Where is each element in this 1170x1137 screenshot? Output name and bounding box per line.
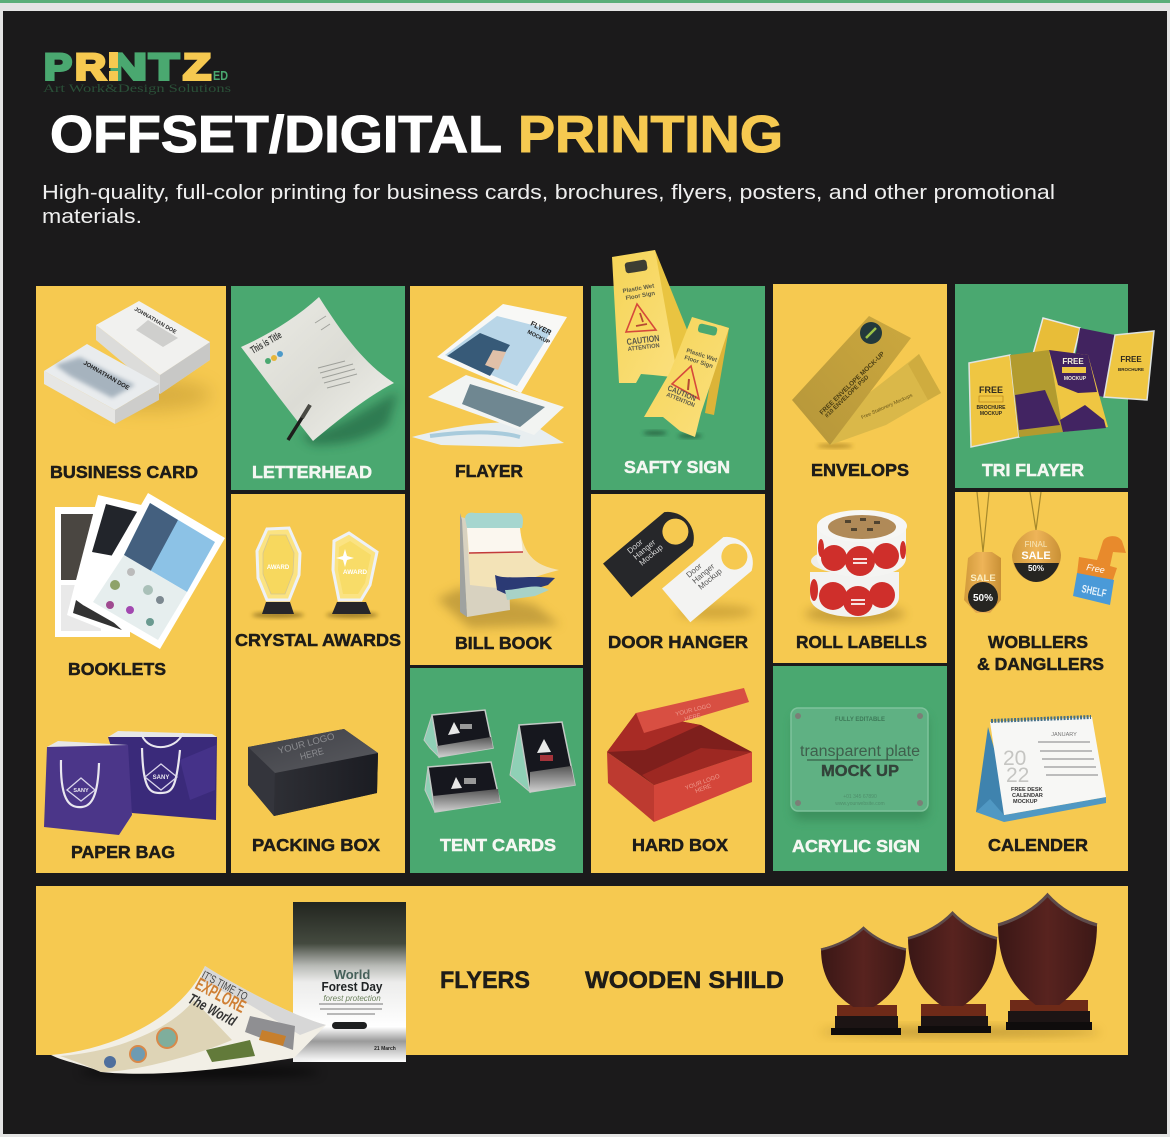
icon: door hangers: Door — [626, 537, 645, 556]
panel: safty sign — [591, 250, 765, 490]
icon: tri-fold brochures: BROCHURE — [977, 405, 1006, 411]
label: door hanger: DOOR HANGER — [608, 632, 748, 652]
icon: booklets — [55, 493, 225, 649]
panel: tent cards — [410, 668, 583, 873]
panel: crystal awards and packing box — [231, 494, 405, 873]
icon: red hard box — [607, 688, 752, 822]
icon: acrylic plate: transparent plate — [800, 743, 920, 760]
icon: wet floor signs: ATTENTION — [665, 392, 695, 409]
icon: tri-fold brochures — [969, 318, 1154, 447]
icon: door hangers: Door — [685, 561, 704, 580]
panel: envelops and roll labels — [773, 284, 947, 663]
description: High-quality, full-color printing for business cards, brochures, flyers, posters, and other promotional — [42, 181, 1055, 204]
icon: wet floor signs — [612, 250, 729, 438]
icon: letterhead sheet: This is Title — [248, 329, 284, 357]
icon: wet floor signs: ATTENTION — [628, 343, 660, 353]
icon: wet floor signs: Plastic Wet — [622, 284, 655, 295]
icon: paper bags — [44, 731, 217, 835]
icon: wet floor signs: CAUTION — [666, 384, 698, 403]
icon: curled explore flyer: EXPLORE — [192, 974, 249, 1017]
label: flyers: FLYERS — [440, 967, 530, 994]
icon: world forest day flyer: forest protection — [323, 994, 381, 1003]
label: wobllers and danglers: WOBLLERS — [988, 632, 1088, 652]
icon: business cards: JOHNATHAN DOE — [133, 307, 177, 336]
icon: door hangers: Hanger — [691, 562, 717, 586]
label: crystal awards: CRYSTAL AWARDS — [235, 630, 401, 650]
title: OFFSET/DIGITAL — [50, 106, 502, 164]
label: hard box: HARD BOX — [632, 835, 728, 855]
label: calender: CALENDER — [988, 835, 1088, 855]
icon: curled explore flyer — [51, 966, 326, 1078]
icon: packing box: HERE — [299, 746, 325, 763]
icon: red hard box: YOUR LOGO — [685, 774, 721, 792]
icon: wet floor signs: Floor Sign — [683, 355, 714, 370]
icon: tri-fold brochures: MOCKUP — [1064, 376, 1087, 382]
description — [42, 181, 1055, 228]
icon: red hard box: HERE — [684, 713, 702, 723]
logo: PRINTZ ED: P — [44, 46, 72, 88]
icon: business cards — [44, 301, 212, 424]
panel: acrylic sign — [773, 666, 947, 871]
label: wooden shild: WOODEN SHILD — [585, 967, 784, 994]
label: envelops: ENVELOPS — [811, 460, 909, 480]
label: wobllers and danglers: & DANGLLERS — [977, 654, 1104, 674]
icon: world forest day flyer: Forest Day — [322, 979, 383, 994]
icon: wet floor signs: CAUTION — [626, 333, 660, 347]
icon: desk calendar: 20 — [1003, 747, 1026, 770]
icon: danglers: SALE — [1021, 550, 1051, 562]
label: safty sign: SAFTY SIGN — [624, 457, 730, 477]
icon: tri-fold brochures: BROCHURE — [1118, 367, 1144, 372]
icon: red hard box: HERE — [695, 784, 712, 795]
icon: world forest day flyer: World — [334, 967, 370, 982]
icon: wooden shields — [820, 894, 1100, 1037]
icon: desk calendar: FREE DESK — [1011, 787, 1043, 793]
label: bill book: BILL BOOK — [455, 633, 552, 653]
icon: acrylic plate — [791, 708, 928, 820]
label: booklets: BOOKLETS — [68, 659, 166, 679]
panel: bottom banner — [36, 886, 1128, 1078]
icon: packing box: YOUR LOGO — [277, 731, 336, 757]
icon: world forest day flyer — [293, 902, 406, 1062]
icon: danglers — [964, 492, 1126, 613]
label: paper bag: PAPER BAG — [71, 842, 175, 862]
icon: tri-fold brochures: MOCKUP — [980, 411, 1003, 417]
panel: wobllers and calender — [955, 492, 1128, 871]
icon: acrylic plate: FULLY EDITABLE — [835, 717, 885, 723]
icon: wet floor signs: Plastic Wet — [685, 348, 718, 364]
label: roll labells: ROLL LABELLS — [796, 632, 927, 652]
panel: letterhead — [231, 286, 405, 490]
panel: column 1 — [36, 286, 226, 873]
label: flayer: FLAYER — [455, 461, 523, 481]
icon: door hangers — [603, 504, 761, 622]
icon: business cards: JOHNATHAN DOE — [82, 361, 130, 392]
icon: flyers stack: FLYER — [529, 321, 552, 337]
label: business card: BUSINESS CARD — [50, 462, 198, 482]
icon: tent cards — [424, 710, 575, 812]
description: materials. — [42, 205, 142, 228]
icon: paper bags: SANY — [153, 775, 169, 781]
icon: tri-fold brochures: FREE — [979, 385, 1003, 395]
logo: PRINTZ ED: R — [75, 46, 106, 88]
icon: acrylic plate: www.yourwebsite.com — [835, 801, 885, 807]
icon: desk calendar: MOCKUP — [1013, 799, 1038, 805]
icon: envelopes: Free Stationery Mockups — [860, 393, 914, 421]
icon: door hangers: Hanger — [632, 538, 658, 562]
icon: crystal awards — [252, 528, 378, 618]
title: PRINTING — [518, 106, 783, 164]
icon: roll labels — [805, 510, 907, 623]
logo: PRINTZ ED: Z — [183, 46, 211, 88]
icon: door hangers: Mockup — [697, 566, 724, 592]
panel: flayer and bill book — [410, 286, 583, 665]
icon: danglers: 50% — [1028, 564, 1044, 573]
icon: danglers: 50% — [973, 593, 993, 604]
icon: envelopes: FREE ENVELOPE MOCK-UP — [819, 350, 887, 416]
icon: paper bags: SANY — [73, 788, 89, 794]
icon: bill book — [437, 513, 560, 628]
panel: door hanger and hard box — [591, 494, 765, 873]
icon: curled explore flyer: The World — [185, 991, 240, 1030]
icon: desk calendar: CALENDAR — [1012, 793, 1043, 799]
logo: PRINTZ ED — [43, 46, 232, 95]
title — [50, 106, 783, 164]
label: letterhead: LETTERHEAD — [252, 462, 372, 482]
icon: world forest day flyer: 21 March — [374, 1046, 396, 1052]
logo: PRINTZ ED: Art Work&Design Solutions — [43, 83, 232, 95]
icon: danglers: Free — [1086, 562, 1106, 575]
icon: desk calendar — [976, 717, 1106, 822]
icon: red hard box: YOUR LOGO — [675, 703, 712, 718]
logo: PRINTZ ED: T — [149, 46, 180, 88]
label: tent cards: TENT CARDS — [440, 835, 556, 855]
icon: tri-fold brochures: FREE — [1062, 357, 1084, 366]
icon: flyers stack — [412, 304, 567, 447]
icon: danglers: SHELF — [1080, 583, 1108, 600]
icon: letterhead sheet — [241, 297, 398, 445]
icon: crystal awards: AWARD — [267, 565, 290, 571]
panel: tri flayer — [955, 284, 1154, 488]
label: packing box: PACKING BOX — [252, 835, 380, 855]
icon: danglers: FINAL — [1025, 540, 1048, 549]
icon: danglers: SALE — [970, 573, 996, 584]
label: wobllers and danglers — [977, 632, 1104, 674]
logo: PRINTZ ED: N — [109, 46, 147, 88]
icon: acrylic plate: MOCK UP — [821, 763, 899, 780]
icon: desk calendar: JANUARY — [1051, 732, 1077, 738]
icon: crystal awards: AWARD — [343, 569, 367, 576]
label: acrylic sign: ACRYLIC SIGN — [792, 836, 920, 856]
icon: curled explore flyer: IT'S TIME TO — [200, 969, 250, 1003]
icon: desk calendar: 22 — [1006, 764, 1029, 787]
icon: packing box — [248, 729, 378, 816]
icon: envelopes — [792, 316, 941, 448]
logo: PRINTZ ED: ED — [213, 68, 228, 83]
icon: tri-fold brochures: FREE — [1120, 355, 1142, 364]
icon: flyers stack: MOCKUP — [526, 329, 551, 346]
icon: envelopes: #10 ENVELOPE PSD — [824, 374, 871, 419]
label: tri flayer: TRI FLAYER — [982, 460, 1084, 480]
icon: wet floor signs: Floor Sign — [625, 291, 656, 302]
icon: door hangers: Mockup — [638, 542, 665, 568]
icon: acrylic plate: +01 345 67890 — [843, 794, 877, 800]
